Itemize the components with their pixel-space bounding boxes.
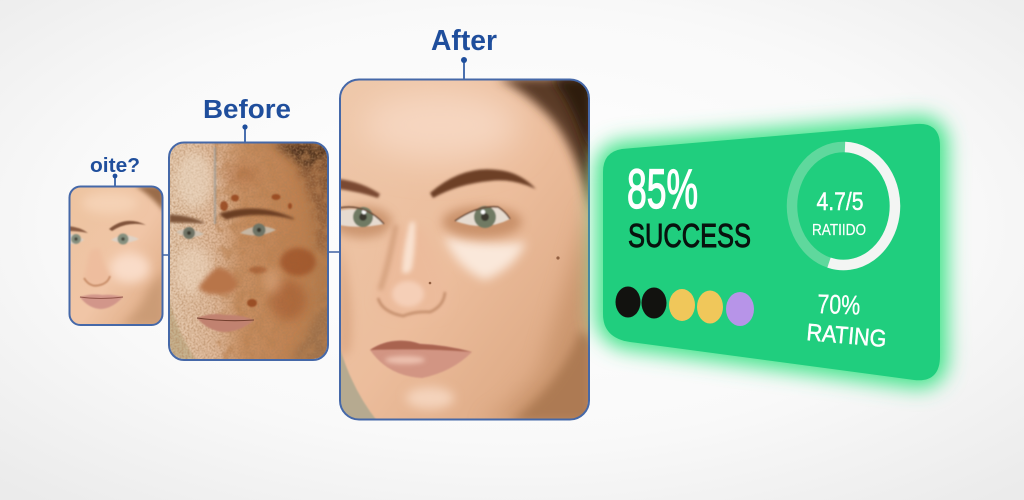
nose [100,266,108,280]
under-eye highlight [444,236,526,280]
after label: After [431,25,497,57]
after connector pin [461,57,467,79]
card glow [603,124,940,380]
ring caption: RATIIDO [812,222,866,239]
panel: small photo [68,155,165,326]
colored dots [616,286,754,326]
success percentage: 85% [627,157,698,220]
before connector pin [242,124,248,142]
success label: SUCCESS [628,217,751,254]
lips [370,341,472,378]
rating label: RATING [805,319,888,353]
brows [220,209,294,219]
after face portrait [332,78,592,422]
before face portrait [168,142,330,361]
brows [109,221,146,231]
skin moles [429,256,560,284]
panel: green results card [603,124,940,380]
before photo frame [169,142,328,360]
brows [430,169,536,198]
small photo frame [70,186,162,325]
small photo label: oite? [90,155,140,177]
center seam [214,147,216,224]
eyes [176,224,276,239]
after photo frame [340,80,589,420]
nose [198,268,238,294]
nose [376,228,448,318]
rating ring [792,147,895,265]
lips [80,294,123,309]
connector lines between photos [162,252,340,255]
ring score: 4.7/5 [816,188,864,216]
background corner [341,350,376,418]
panel: before photo [168,96,330,361]
lips [197,314,254,332]
small photo connector pin [113,174,117,186]
eye socket shading [442,206,522,238]
brown blemishes [220,165,316,320]
rating percentage: 70% [817,289,861,320]
eyes [339,206,510,228]
card body [603,124,940,380]
hair [498,78,592,215]
small face portrait [68,186,165,326]
before label: Before [203,96,291,124]
eyes [68,234,139,244]
cheek and jaw shading [496,228,588,418]
panel: after photo [332,25,592,422]
